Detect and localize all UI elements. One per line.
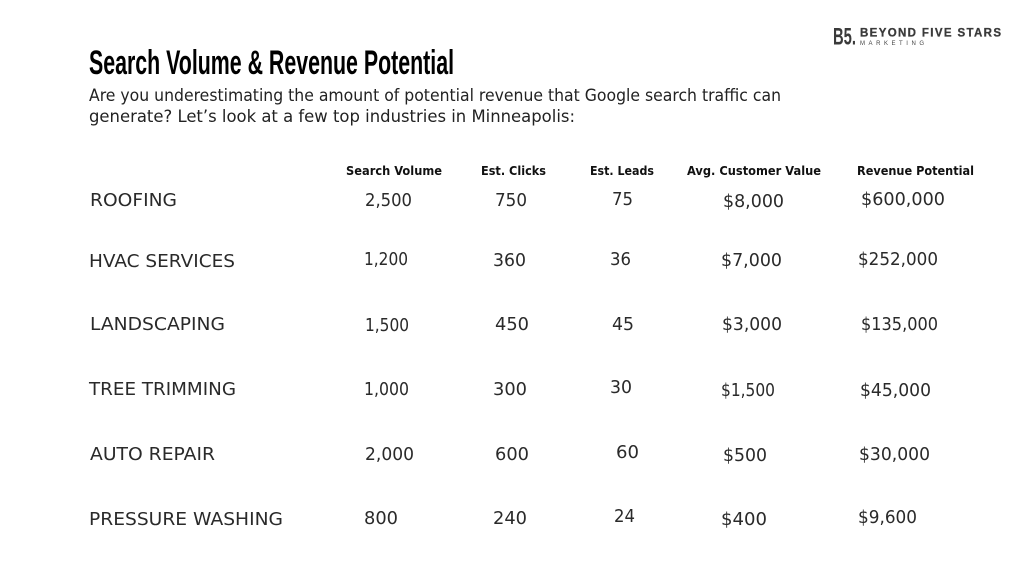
row: tree trimming: 1,000 [364,379,409,400]
logo: Beyond Five Stars Marketing: MARKETING [860,41,924,47]
row: landscaping: $135,000 [861,314,938,335]
logo: Beyond Five Stars Marketing [833,24,1001,50]
row: landscaping: 1,500 [365,315,409,336]
row: auto repair: $500 [723,445,767,466]
logo: Beyond Five Stars Marketing: BEYOND FIVE STARS [860,28,1001,40]
row: roofing: 750 [495,190,527,211]
row: hvac services: 36 [610,249,631,270]
row: hvac services: 1,200 [364,249,408,270]
table header row [346,164,974,178]
table header row: Est. Clicks [481,164,546,178]
row: landscaping: 450 [495,314,529,335]
row: hvac services: $7,000 [721,250,782,271]
intro text: Are you underestimating the amount of potential revenue that Google search traffic can [89,86,781,105]
table header row: Search Volume [346,164,442,178]
intro text [89,86,781,126]
row: tree trimming: 30 [610,377,632,398]
row: pressure washing: $9,600 [858,507,917,528]
row: auto repair: 2,000 [365,444,414,465]
row: tree trimming: TREE TRIMMING [88,379,236,400]
table header row: Revenue Potential [857,164,974,178]
row: landscaping: $3,000 [722,314,782,335]
row: roofing: $600,000 [861,189,945,210]
row: landscaping: LANDSCAPING [90,314,225,335]
table header row: Est. Leads [590,164,654,178]
row: pressure washing: $400 [721,509,767,530]
row: hvac services: HVAC SERVICES [89,251,235,272]
row: auto repair: AUTO REPAIR [90,444,215,465]
row: roofing: ROOFING [90,190,177,211]
row: landscaping [90,314,938,336]
row: tree trimming [88,377,931,401]
row: auto repair: 600 [495,444,529,465]
row: landscaping: 45 [612,314,634,335]
row: pressure washing: PRESSURE WASHING [89,509,283,530]
row: roofing: 2,500 [365,190,412,211]
row: auto repair: $30,000 [859,444,930,465]
row: tree trimming: $1,500 [721,380,775,401]
row: auto repair: 60 [616,442,639,463]
row: tree trimming: 300 [493,379,527,400]
title: Search Volume & Revenue Potential [89,44,454,82]
row: roofing: 75 [612,189,633,210]
row: hvac services: $252,000 [858,249,938,270]
row: pressure washing: 24 [614,506,635,527]
row: roofing [90,189,945,212]
row: roofing: $8,000 [723,191,784,212]
row: auto repair [90,442,930,466]
row: pressure washing [89,506,917,530]
row: pressure washing: 240 [493,508,527,529]
row: hvac services [89,249,938,272]
logo: Beyond Five Stars Marketing: B5. [833,24,856,50]
row: pressure washing: 800 [364,508,398,529]
intro text: generate? Let’s look at a few top industries in Minneapolis: [89,107,575,126]
table header row: Avg. Customer Value [687,164,821,178]
row: hvac services: 360 [493,250,526,271]
row: tree trimming: $45,000 [860,380,931,401]
